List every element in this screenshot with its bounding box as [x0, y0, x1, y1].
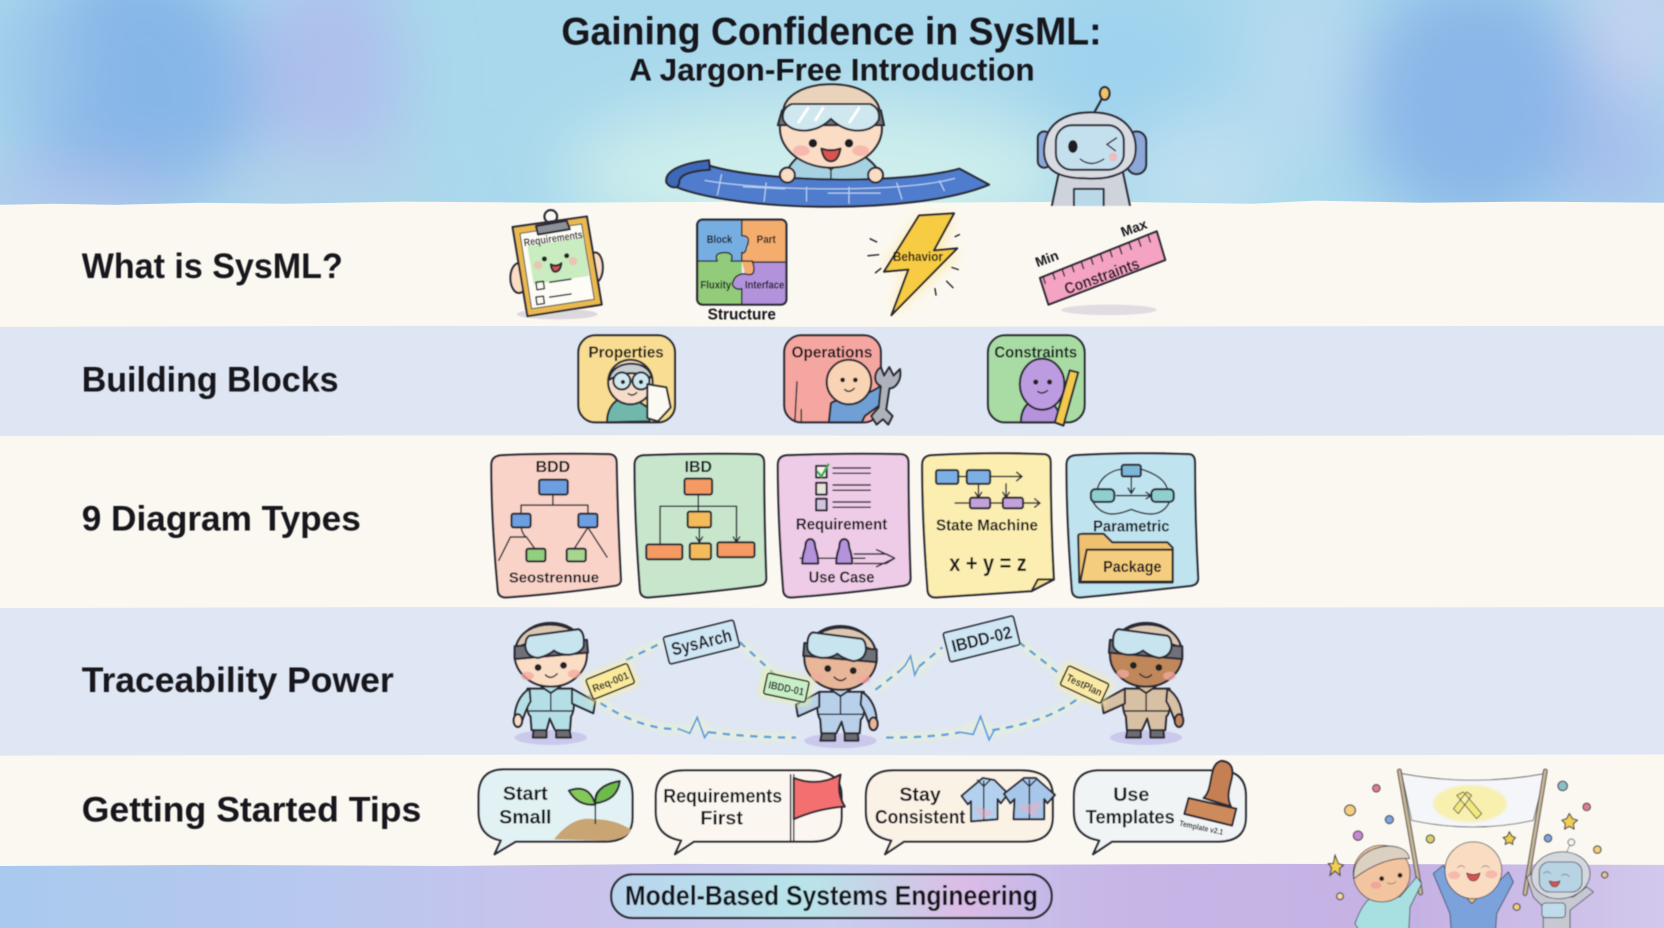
card: State Machine and Parametric equation: x + y = z	[949, 550, 1027, 576]
card: Operations: Operations	[792, 345, 872, 362]
heading: 9 Diagram Types: 9 Diagram Types	[82, 500, 361, 539]
tip: Start Small: Small	[499, 807, 551, 829]
title	[561, 10, 1102, 88]
icon: requirements clipboard	[510, 210, 603, 319]
card: Operations	[784, 335, 900, 424]
tip: Use Templates: Use	[1113, 784, 1149, 806]
card: Requirement and Use Case: Use Case	[809, 570, 875, 587]
robot	[1527, 839, 1593, 928]
panel: Traceability band	[0, 607, 1664, 756]
icon: constraints ruler: Max	[1119, 216, 1149, 240]
figure: left engineer	[512, 621, 597, 746]
illustration: engineer with blueprint	[666, 84, 989, 207]
subtitle: A Jargon-Free Introduction	[629, 52, 1035, 88]
middle worker	[1433, 842, 1513, 928]
tag: TestPlan: TestPlan	[1064, 672, 1104, 699]
icon: structure puzzle: Block	[707, 234, 732, 246]
tag: Req-001	[581, 659, 639, 704]
illustration: celebration group	[1328, 771, 1608, 928]
icon: structure puzzle: Part	[757, 234, 776, 246]
card: Constraints	[988, 335, 1085, 426]
icon: constraints ruler	[1033, 216, 1165, 315]
tip: Stay Consistent	[866, 770, 1055, 854]
icon: constraints ruler: Min	[1033, 248, 1061, 270]
figure: middle engineer	[794, 624, 880, 748]
tag: SysArch: SysArch	[669, 625, 734, 660]
banner	[1399, 771, 1545, 894]
tag: IBD-01	[759, 669, 814, 706]
icon: requirements clipboard: Requirements	[523, 229, 584, 249]
figure: right engineer	[1100, 621, 1186, 746]
icon: constraints ruler: Constraints	[1062, 256, 1142, 298]
panel: Building Blocks band	[0, 326, 1664, 436]
blueprint sheet	[666, 166, 989, 207]
card: IBD	[635, 454, 766, 597]
main title: Gaining Confidence in SysML:	[561, 10, 1102, 54]
icon: structure puzzle: Interface	[745, 280, 784, 292]
tip: Requirements First: Requirements	[663, 785, 782, 807]
tag: IBDD-02: IBDD-02	[949, 622, 1014, 656]
card: Properties	[578, 335, 675, 422]
card: Parametric and Package: Parametric	[1093, 519, 1170, 536]
icon: behavior lightning: Behavior	[893, 249, 943, 264]
icon: structure puzzle: Fluxity	[700, 280, 731, 292]
tip: Stay Consistent: Stay	[899, 784, 941, 806]
heading: Traceability Power: Traceability Power	[82, 661, 394, 700]
panel: header watercolor band	[0, 0, 1664, 205]
chart: traceability dashed links	[589, 642, 1082, 740]
card: Constraints: Constraints	[994, 345, 1077, 362]
card: State Machine and Parametric equation	[922, 453, 1054, 597]
tag: Req-001: Req-001	[591, 670, 631, 695]
heading: What is SysML: What is SysML?	[82, 247, 343, 286]
card: Parametric and Package: Package	[1103, 559, 1162, 576]
card: Properties: Properties	[588, 345, 664, 362]
card: Requirement and Use Case: Requirement	[796, 517, 887, 534]
panel: footer band	[0, 864, 1664, 928]
card: BDD	[491, 454, 621, 597]
card: BDD: Seostrennue	[509, 571, 599, 587]
tip: Requirements First: First	[700, 808, 743, 830]
tag: TestPlan	[1056, 661, 1113, 708]
footer pill	[611, 874, 1052, 918]
card: State Machine and Parametric equation: State Machine	[936, 518, 1038, 535]
card: Parametric and Package	[1067, 453, 1198, 597]
panel: What is SysML band	[0, 201, 1664, 326]
tip: Use Templates: Templates	[1086, 807, 1175, 829]
tip: Stay Consistent: Consistent	[875, 807, 966, 829]
left worker	[1353, 845, 1422, 928]
tip: Use Templates	[1074, 761, 1246, 854]
tip: Start Small: Start	[503, 783, 548, 805]
card: BDD: BDD	[536, 459, 570, 476]
illustration: winking robot	[1038, 87, 1146, 212]
tip: Requirements First	[656, 770, 845, 854]
icon: structure puzzle	[697, 220, 786, 323]
tip: Use Templates: Template v2.1	[1179, 819, 1225, 837]
icon: structure puzzle: Structure	[708, 306, 776, 323]
tip: Start Small	[479, 769, 632, 854]
footer pill: Model-Based Systems Engineering	[625, 880, 1038, 911]
heading: Getting Started Tips: Getting Started Tips	[82, 790, 421, 829]
card: IBD: IBD	[685, 459, 712, 476]
card: Requirement and Use Case	[778, 454, 911, 597]
icon: behavior lightning	[868, 213, 960, 315]
tag: IBD-01: IBDD-01	[767, 679, 805, 699]
confetti	[1328, 781, 1608, 910]
heading: Building Blocks: Building Blocks	[82, 361, 339, 400]
